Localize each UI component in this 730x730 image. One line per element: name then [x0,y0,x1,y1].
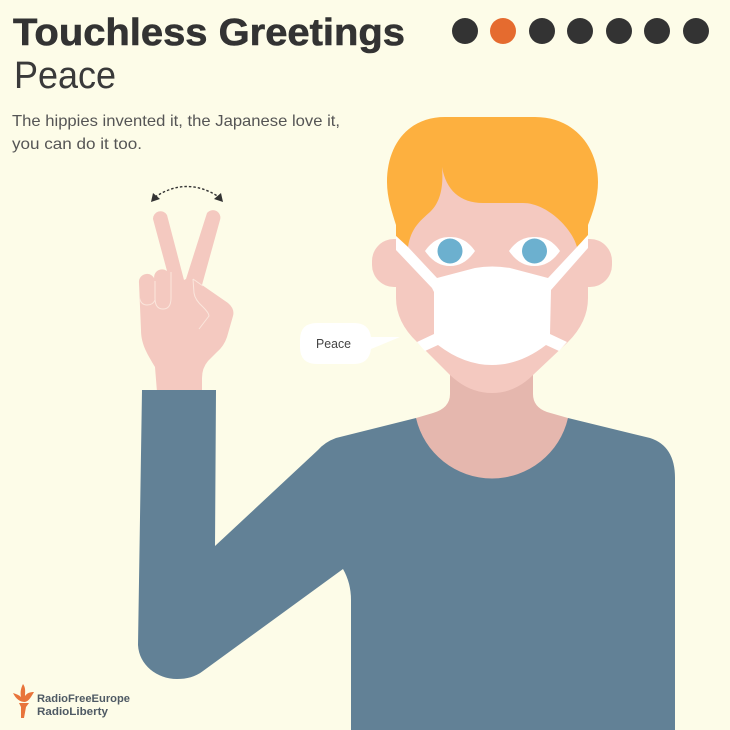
neck [416,360,568,478]
face [396,160,588,393]
speech bubble [300,323,400,364]
icon: torch flame [13,684,34,718]
description text [12,113,340,153]
eyes [425,237,560,266]
description text: you can do it too. [12,136,142,153]
subtitle: Peace: Peace [14,55,116,97]
title: Touchless Greetings [13,12,405,54]
logo text: RadioFreeEurope [37,693,130,705]
face mask with straps [396,235,588,365]
logo text: RadioLiberty [37,706,109,718]
logo: RFE/RL [13,684,130,718]
hand [139,210,233,392]
hair [387,117,598,247]
progress dots [452,18,709,44]
logo text [37,693,130,718]
icon: motion arrow [151,186,223,202]
ears [372,239,612,287]
description text: The hippies invented it, the Japanese love it, [12,113,340,130]
speech bubble: Peace [316,336,351,351]
body: sweater with raised arm [138,390,675,730]
